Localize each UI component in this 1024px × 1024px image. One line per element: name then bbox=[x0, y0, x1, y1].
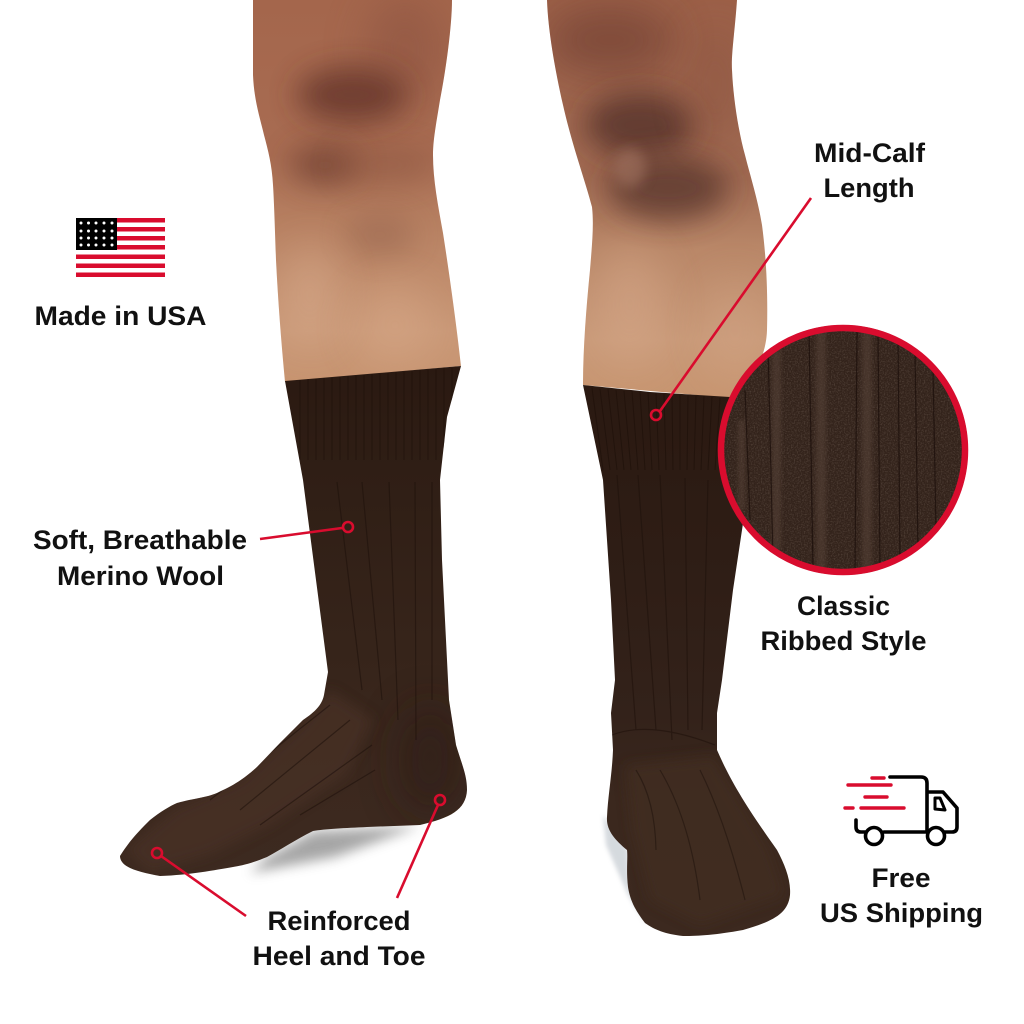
knit ribs bbox=[745, 330, 936, 570]
label: merino wool: Merino Wool bbox=[57, 561, 224, 591]
left sock bbox=[120, 366, 467, 876]
label: free: Free bbox=[872, 863, 930, 893]
right sock ribs bbox=[612, 475, 745, 900]
callout: merino wool marker bbox=[260, 522, 353, 539]
right foot highlight bbox=[720, 757, 766, 835]
shadow beside right foot bbox=[603, 815, 648, 928]
left sock ribs bbox=[210, 482, 432, 825]
right sock bbox=[583, 385, 790, 936]
shadow under left foot bbox=[250, 826, 420, 873]
left foot highlight bbox=[125, 690, 375, 873]
label: ribbed style: Ribbed Style bbox=[760, 626, 926, 656]
photo: left leg bbox=[245, 0, 465, 390]
label: length: Length bbox=[824, 173, 914, 203]
label: reinforced: Reinforced bbox=[268, 906, 410, 936]
left cuff ribbing bbox=[300, 368, 452, 460]
label: mid-calf: Mid-Calf bbox=[814, 138, 925, 168]
lens ring bbox=[721, 328, 965, 572]
left heel shade bbox=[420, 702, 467, 824]
label: made in USA: Made in USA bbox=[34, 301, 206, 331]
icon: US flag bbox=[76, 218, 165, 277]
label: soft breathable: Soft, Breathable bbox=[33, 525, 247, 555]
detail lens: ribbed knit swatch bbox=[718, 325, 968, 575]
callout: mid-calf marker bbox=[651, 198, 811, 420]
knit grain bbox=[718, 325, 968, 575]
label: classic: Classic bbox=[797, 591, 890, 621]
callout: heel marker bbox=[397, 795, 445, 898]
label: US shipping: US Shipping bbox=[820, 898, 983, 928]
callout: toe marker bbox=[152, 848, 246, 916]
label: heel and toe: Heel and Toe bbox=[252, 941, 426, 971]
knit highlights bbox=[738, 330, 872, 570]
right cuff ribbing bbox=[592, 388, 720, 470]
icon: delivery truck bbox=[845, 777, 957, 844]
photo: right leg bbox=[540, 0, 775, 400]
